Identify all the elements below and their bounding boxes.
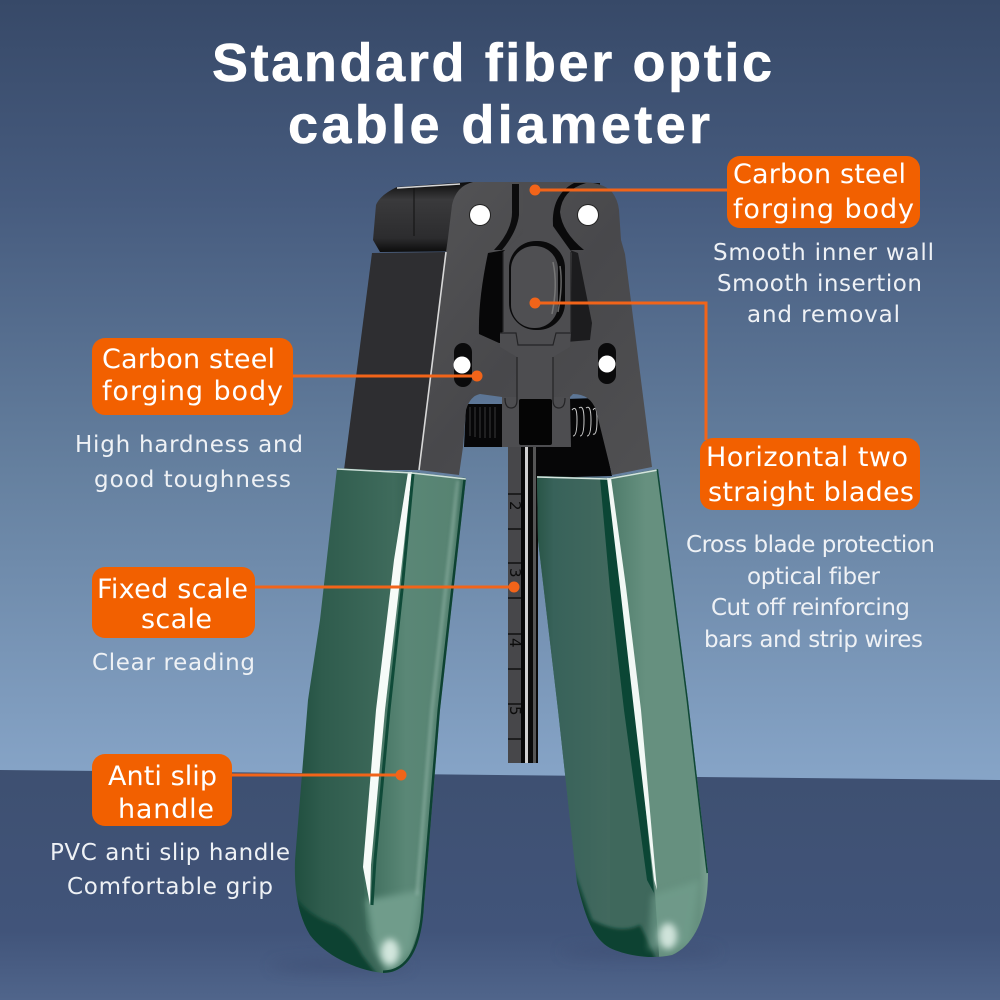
- text: high hardness: [75, 432, 303, 493]
- text: cross blade protection: optical fiber: [747, 564, 881, 590]
- text: smooth inner wall: Smooth insertion: [717, 271, 922, 297]
- callout: top carbon steel forging body: Carbon steel: [733, 159, 906, 190]
- callout: fixed scale: [92, 567, 520, 638]
- dark inner area with springs: [464, 404, 506, 447]
- callout: horizontal two straight blades: [530, 298, 920, 510]
- background wall: [0, 0, 1000, 785]
- center plate detail lines: [500, 252, 571, 408]
- callout: top carbon steel forging body: forging body: [733, 194, 914, 225]
- blade slot under plate: [519, 399, 552, 445]
- ruler scale: 2: [506, 501, 524, 511]
- text: cross blade protection: [686, 532, 935, 653]
- ruler scale: [506, 445, 538, 763]
- text: cross blade protection: bars and strip wires: [704, 627, 923, 653]
- title: [212, 33, 772, 155]
- left blade cavity: [479, 250, 505, 343]
- text: high hardness: good toughness: [94, 467, 291, 493]
- text: smooth inner wall: [713, 240, 934, 328]
- text: cross blade protection: Cut off reinforcing: [711, 595, 910, 621]
- callout: anti slip handle: handle: [118, 794, 214, 825]
- front plate arms: [419, 182, 652, 475]
- center plate: [500, 182, 572, 447]
- right blade cavity: [566, 250, 592, 342]
- right handle: [537, 469, 708, 957]
- callout: left carbon steel forging body: forging body: [102, 376, 283, 407]
- text: smooth inner wall: Smooth inner wall: [713, 240, 934, 266]
- oval press: [509, 241, 565, 330]
- callout: horizontal two straight blades: Horizontal two: [706, 442, 908, 473]
- callout: top carbon steel forging body: [530, 156, 920, 228]
- callout: anti slip handle: [92, 754, 406, 826]
- side grey panel: [344, 252, 446, 470]
- callout: anti slip handle: Anti slip: [108, 761, 217, 792]
- text: smooth inner wall: and removal: [747, 302, 900, 328]
- floor shadows: [270, 946, 720, 973]
- text: pvc anti slip handle: PVC anti slip handle: [50, 840, 290, 866]
- tool: fiber stripper: [280, 182, 720, 985]
- ruler scale: 5: [506, 706, 524, 716]
- rivet holes: [469, 204, 599, 226]
- text: cross blade protection: Cross blade protection: [686, 532, 935, 558]
- springs: [470, 407, 597, 438]
- callout: horizontal two straight blades: straight blades: [708, 477, 914, 508]
- callout: fixed scale: Fixed scale: [97, 574, 248, 605]
- adjustment slots: [454, 343, 616, 387]
- left groove: [494, 184, 519, 250]
- text: pvc anti slip handle: [50, 840, 290, 900]
- text: high hardness: High hardness and: [75, 432, 303, 458]
- callout: fixed scale: scale: [141, 604, 212, 635]
- callout: left carbon steel forging body: [92, 338, 482, 415]
- left handle: [294, 468, 466, 973]
- title: cable diameter: [288, 95, 710, 155]
- ruler scale: 3: [506, 568, 524, 578]
- background floor: [0, 770, 1000, 1000]
- right groove crescent: [553, 183, 586, 250]
- text: clear reading: Clear reading: [92, 650, 255, 676]
- black hinge back: [373, 182, 600, 252]
- title: Standard fiber optic: [212, 33, 772, 93]
- ruler scale: 4: [506, 638, 524, 648]
- text: pvc anti slip handle: Comfortable grip: [67, 874, 273, 900]
- callout: left carbon steel forging body: Carbon steel: [102, 344, 275, 375]
